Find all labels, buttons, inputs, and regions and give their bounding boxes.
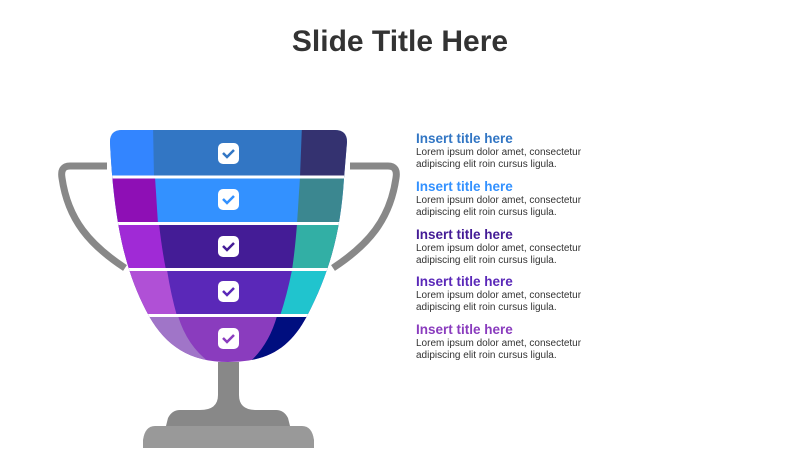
- text item 2: [416, 179, 581, 218]
- text item 2: Insert title here: [416, 179, 513, 194]
- handle: left: [62, 166, 125, 268]
- text item 4: [416, 274, 581, 313]
- text item 4: Insert title here: [416, 274, 513, 289]
- title: Slide Title Here: [292, 25, 508, 58]
- trophy: [58, 130, 400, 448]
- text item 5: Insert title here: [416, 322, 513, 337]
- handle: right: [333, 166, 396, 268]
- text item 3: Insert title here: [416, 227, 513, 242]
- icon: checkbox 4: [218, 281, 239, 302]
- icon: checkbox 1: [218, 143, 239, 164]
- icon: checkbox 3: [218, 236, 239, 257]
- stem and base: [143, 362, 314, 448]
- text item 4: Lorem ipsum dolor amet, consectetur adipiscing elit roin cursus ligula.: [416, 290, 581, 313]
- icon: checkbox 2: [218, 189, 239, 210]
- text item 5: [416, 322, 581, 361]
- text item 5: Lorem ipsum dolor amet, consectetur adipiscing elit roin cursus ligula.: [416, 338, 581, 361]
- text item 1: Lorem ipsum dolor amet, consectetur adipiscing elit roin cursus ligula.: [416, 147, 581, 170]
- text item 2: Lorem ipsum dolor amet, consectetur adipiscing elit roin cursus ligula.: [416, 195, 581, 218]
- icon: checkbox 5: [218, 328, 239, 349]
- text item 1: [416, 131, 581, 170]
- text item 3: [416, 227, 581, 266]
- text item 1: Insert title here: [416, 131, 513, 146]
- text item 3: Lorem ipsum dolor amet, consectetur adipiscing elit roin cursus ligula.: [416, 243, 581, 266]
- cup bands: [110, 130, 347, 362]
